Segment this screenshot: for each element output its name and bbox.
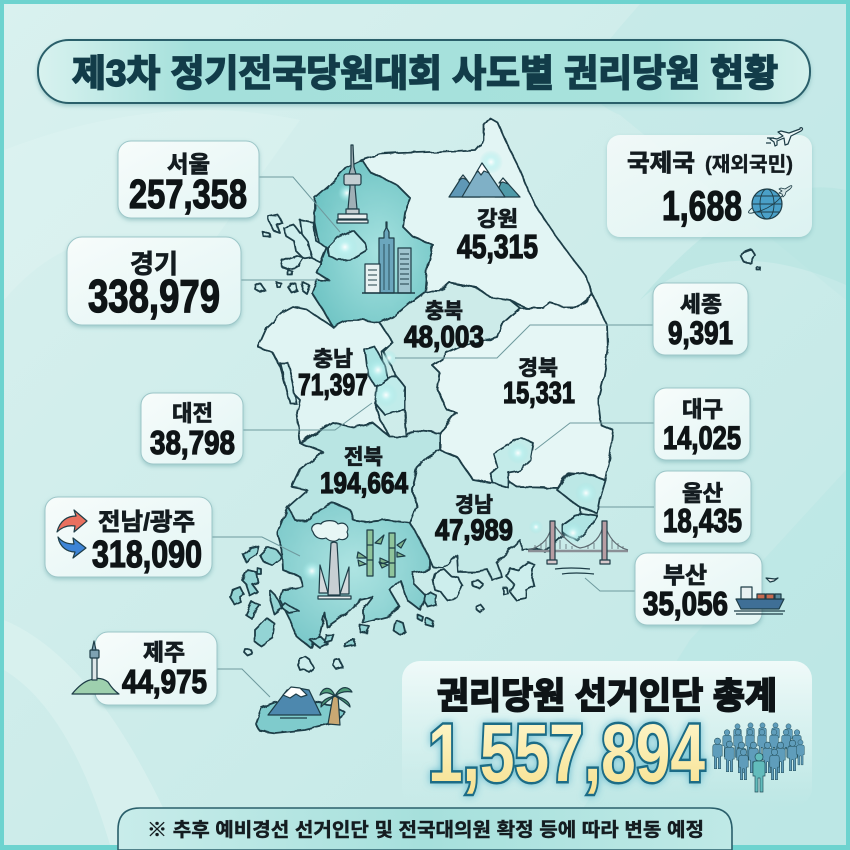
- card: Gyeonggi: 경기: [130, 249, 178, 279]
- region: Gyeongbuk: [432, 295, 613, 488]
- footnote banner: ※ 추후 예비경선 선거인단 및 전국대의원 확정 등에 따라 변동 예정: [147, 819, 704, 841]
- region: Gyeonggi: [312, 160, 433, 327]
- card: Daegu: 14,025: [663, 420, 741, 456]
- region: Busan: [563, 513, 597, 540]
- map labels: 충북: [425, 300, 463, 323]
- card: Ulsan: [655, 471, 751, 543]
- card: Daegu: [654, 388, 750, 460]
- map labels: 경남: [455, 494, 493, 517]
- card: Daejeon: 38,798: [150, 424, 235, 461]
- icon: mountains: [449, 163, 520, 197]
- total panel: 권리당원 선거인단 총계: [437, 675, 777, 716]
- card: Sejong: [653, 283, 748, 355]
- card: Seoul: 서울: [167, 151, 210, 177]
- card: Daegu: 대구: [682, 397, 723, 422]
- card: Seoul: 257,358: [129, 171, 247, 217]
- total number: 1,557,894: [428, 708, 705, 799]
- icon: Seoul tower: [337, 145, 368, 223]
- Geoje island: [506, 562, 534, 600]
- region: Chungbuk: [380, 283, 520, 437]
- connector lines: [212, 177, 654, 697]
- card: Gyeonggi: [67, 237, 241, 325]
- map labels: 전북: [344, 446, 383, 469]
- card: Jeju: [72, 632, 217, 705]
- region: Sejong: [365, 347, 388, 386]
- map labels: 71,397: [298, 367, 368, 402]
- card: Busan: 35,056: [643, 585, 728, 622]
- region: Gyeongnam: [410, 450, 580, 580]
- glow sparks: [282, 150, 597, 715]
- card: Daejeon: 대전: [172, 401, 213, 426]
- icon: Jeju mountain and palm: [268, 687, 352, 725]
- icon: globe: [748, 186, 792, 219]
- region: Ulsan: [557, 473, 605, 513]
- map labels: 47,989: [435, 514, 513, 547]
- card: Busan: 부산: [663, 562, 707, 588]
- icon: bridge: [528, 521, 628, 574]
- region: Gangwon: [362, 118, 593, 308]
- region: Daegu: [490, 437, 533, 487]
- card: Jeonnam/Gwangju: 318,090: [92, 534, 202, 576]
- icon: city skyline: [362, 222, 415, 293]
- card: Jeonnam/Gwangju: 전남/광주: [98, 509, 195, 536]
- region: Daejeon: [375, 377, 405, 415]
- icon: crowd of people: [713, 723, 804, 792]
- card: Gyeonggi: 338,979: [88, 270, 220, 322]
- icon: monument: [312, 521, 351, 599]
- card: Sejong: 9,391: [668, 315, 733, 351]
- card: International: 국제국: [627, 150, 695, 177]
- card: Seoul: [118, 141, 259, 218]
- map labels: 45,315: [457, 228, 538, 265]
- card: Daejeon: [141, 393, 243, 464]
- title banner: [38, 40, 810, 103]
- Jeju island: [256, 698, 345, 733]
- region: Chungnam: [258, 307, 393, 443]
- card: Jeju: 제주: [143, 639, 185, 665]
- map labels: 충남: [313, 348, 353, 371]
- card: International: 1,688: [662, 182, 742, 229]
- card: International: [607, 128, 812, 237]
- icon: airplane: [766, 128, 803, 146]
- islands: [230, 215, 760, 672]
- card: Sejong: 세종: [680, 292, 722, 317]
- card: International: (재외국민): [705, 153, 793, 176]
- total panel: [402, 661, 812, 806]
- map labels: 경북: [518, 357, 558, 380]
- card: Jeonnam/Gwangju: [45, 497, 212, 577]
- region: Jeonbuk: [288, 423, 440, 523]
- card: Jeju: 44,975: [122, 663, 207, 700]
- icon: bamboo: [357, 530, 406, 577]
- region: Seoul: [327, 230, 367, 260]
- map of South Korea: [230, 118, 760, 733]
- map labels: 194,664: [320, 467, 408, 500]
- card: Busan: [635, 553, 785, 625]
- footnote banner: [118, 808, 732, 850]
- icon: Jeju tower on hill: [72, 641, 119, 694]
- icon: swap arrows: [57, 510, 87, 558]
- map labels: [298, 208, 575, 547]
- map labels: 15,331: [503, 375, 575, 410]
- Namhae island: [433, 570, 463, 600]
- map labels: 48,003: [404, 319, 484, 354]
- card: Ulsan: 울산: [682, 481, 723, 506]
- card: Ulsan: 18,435: [663, 502, 742, 539]
- region: Jeonnam: [277, 503, 430, 647]
- map labels: 강원: [477, 208, 518, 231]
- title banner: 제3차 정기전국당원대회 사도별 권리당원 현황: [72, 53, 778, 94]
- icon: cargo ship: [734, 578, 785, 614]
